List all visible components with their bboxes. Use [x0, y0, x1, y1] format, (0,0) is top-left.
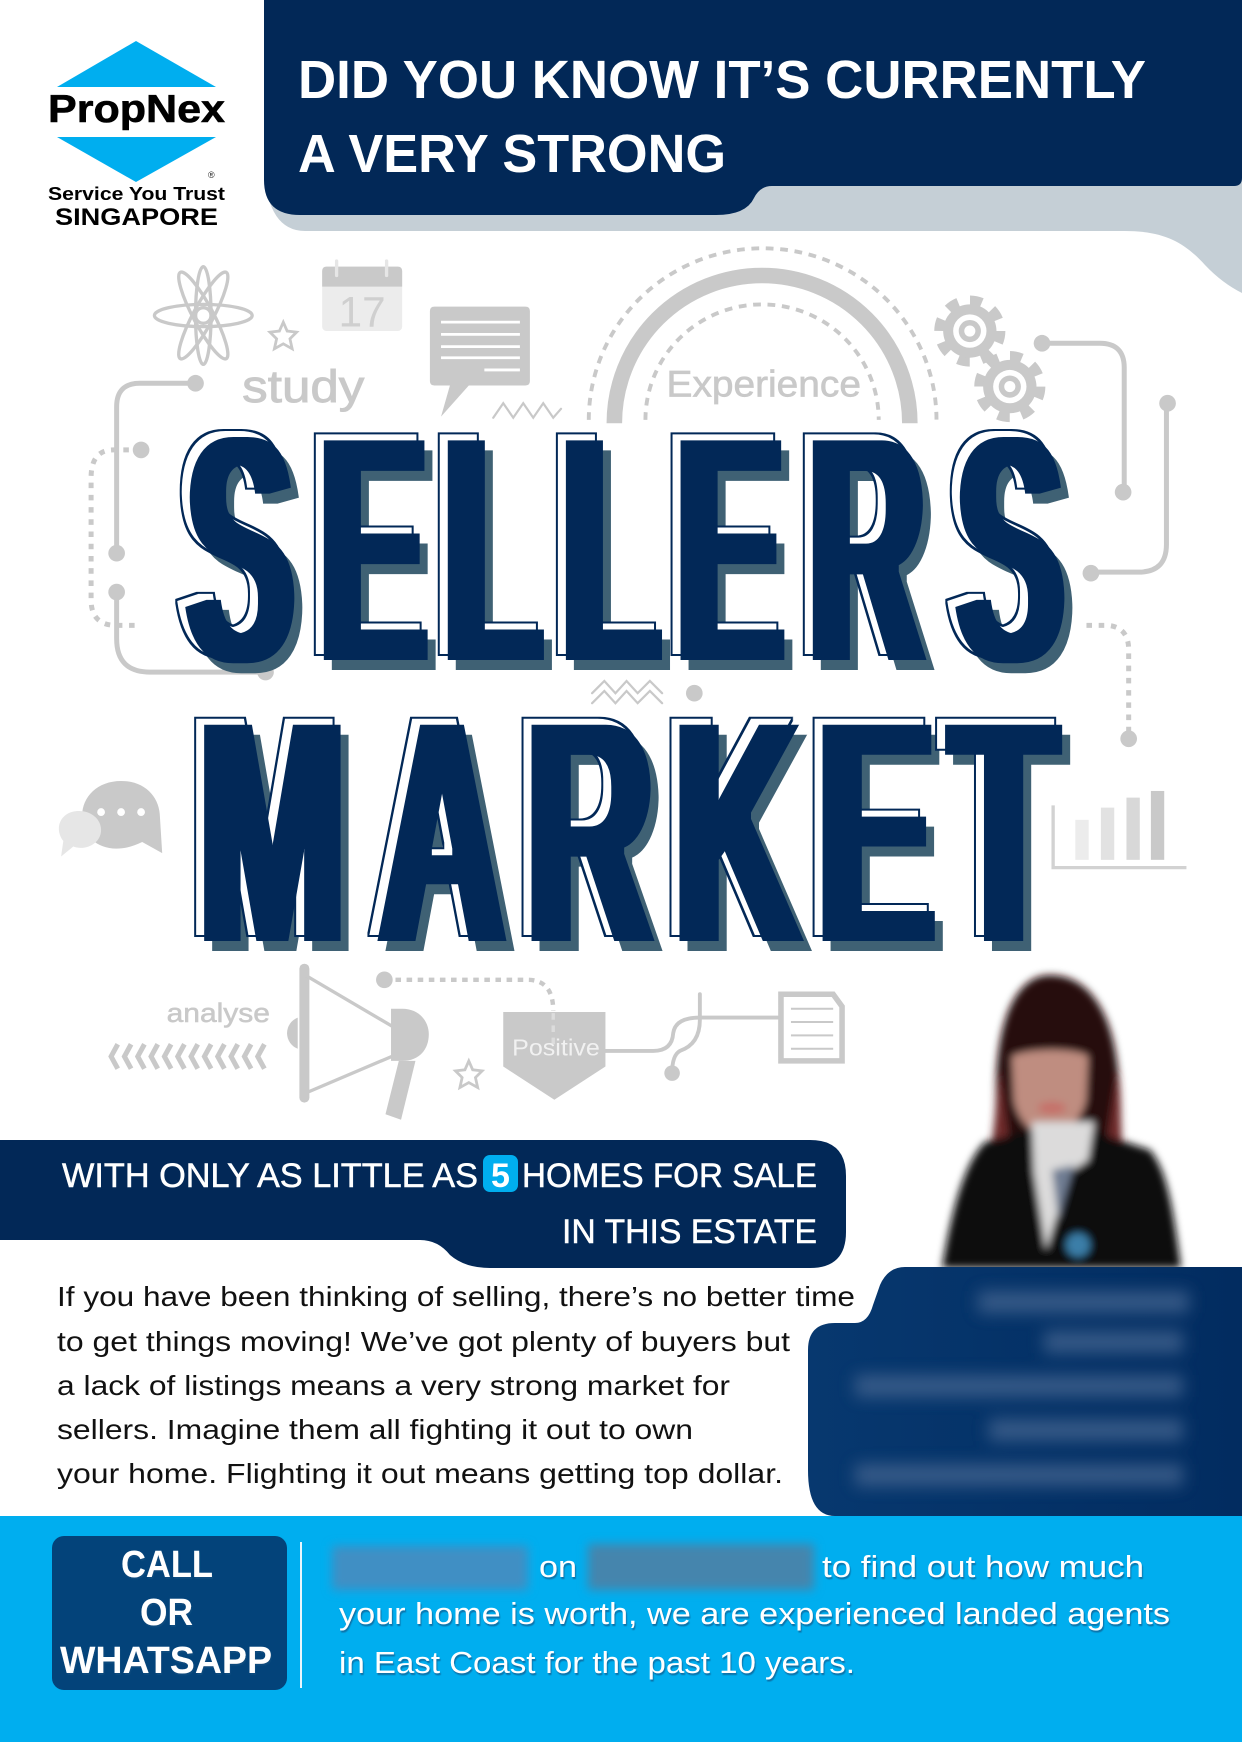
call-to-action text: to find out how much — [822, 1549, 1144, 1584]
estate callout banner: IN THIS ESTATE — [562, 1213, 817, 1251]
headline: SELLERS: SELLERS — [195, 376, 1072, 743]
call-to-action text: on — [539, 1549, 577, 1584]
agent photo (blurred) — [942, 975, 1181, 1268]
call-to-action text — [339, 1549, 1170, 1680]
icon: small star — [455, 1061, 482, 1088]
call or whatsapp box: CALL — [121, 1544, 213, 1586]
divider — [300, 1542, 302, 1688]
call-to-action text: your home is worth, we are experienced landed agents — [339, 1596, 1170, 1631]
call or whatsapp box: WHATSAPP — [60, 1640, 272, 1682]
estate callout banner: HOMES FOR SALE — [522, 1157, 817, 1195]
header grey backing swoosh — [264, 150, 1242, 293]
body paragraph — [57, 1281, 855, 1489]
body paragraph: to get things moving! We’ve got plenty of buyers but — [57, 1326, 790, 1357]
icon: bar chart — [1053, 791, 1186, 868]
PropNex logo: ® — [208, 170, 215, 180]
blurred name — [332, 1546, 528, 1590]
PropNex logo: SINGAPORE — [55, 204, 218, 231]
crossing connector lines — [605, 994, 781, 1081]
call-to-action text: in East Coast for the past 10 years. — [339, 1645, 855, 1680]
icon: gears — [940, 301, 1040, 417]
call or whatsapp box — [52, 1536, 287, 1690]
headline: SELLERS: SELLERS — [187, 366, 1064, 733]
chevron strip — [111, 1044, 264, 1069]
headline: MARKET: MARKET — [191, 647, 1049, 1008]
header panel with title — [264, 0, 1242, 215]
estate callout banner — [0, 1140, 846, 1268]
background line-art decorations — [59, 248, 1186, 1120]
body paragraph: sellers. Imagine them all fighting it out to own — [57, 1414, 693, 1445]
icon: document — [781, 994, 842, 1061]
PropNex logo — [48, 41, 225, 231]
headline: MARKET: MARKET — [191, 647, 1049, 1008]
body paragraph: a lack of listings means a very strong market for — [57, 1370, 730, 1401]
header panel with title: A VERY STRONG — [298, 124, 726, 184]
icon: calendar — [322, 261, 402, 336]
arch with dashed rings — [589, 248, 936, 423]
icon: speech bubble with lines — [430, 307, 530, 417]
PropNex logo: PropNex — [48, 88, 225, 131]
headline: SELLERS: SELLERS — [179, 360, 1056, 727]
word: Experience: Experience — [667, 364, 861, 405]
headline: MARKET: MARKET — [199, 653, 1057, 1014]
blurred phone number — [588, 1544, 814, 1590]
badge: 5 — [483, 1155, 518, 1195]
icon: atom — [154, 267, 252, 364]
agent contact panel (blurred details) — [808, 1267, 1242, 1516]
badge: 5: 5 — [491, 1157, 510, 1195]
decorative zigzag — [493, 403, 561, 418]
dashed connector from megaphone — [376, 971, 553, 1011]
icon: calendar: 17 — [339, 289, 386, 336]
word: analyse: analyse — [167, 998, 270, 1028]
word: study: study — [242, 361, 365, 412]
headline: SELLERS: SELLERS — [179, 360, 1056, 727]
call or whatsapp box: OR — [140, 1592, 193, 1634]
estate callout banner: WITH ONLY AS LITTLE AS — [62, 1157, 478, 1195]
header panel with title: DID YOU KNOW IT’S CURRENTLY — [298, 50, 1146, 110]
connector lines with dots — [91, 335, 1176, 747]
icon: megaphone — [287, 969, 429, 1120]
positive badge: Positive — [512, 1034, 600, 1060]
body paragraph: If you have been thinking of selling, there’s no better time — [57, 1281, 855, 1312]
headline: MARKET: MARKET — [207, 663, 1065, 1024]
footer blue band — [0, 1516, 1242, 1742]
body paragraph: your home. Flighting it out means getting top dollar. — [57, 1458, 783, 1489]
positive badge — [503, 1012, 605, 1100]
decorative double zigzag — [592, 681, 662, 703]
PropNex logo: Service You Trust — [48, 184, 225, 204]
icon: chat bubbles — [59, 781, 162, 857]
icon: star — [270, 322, 297, 349]
